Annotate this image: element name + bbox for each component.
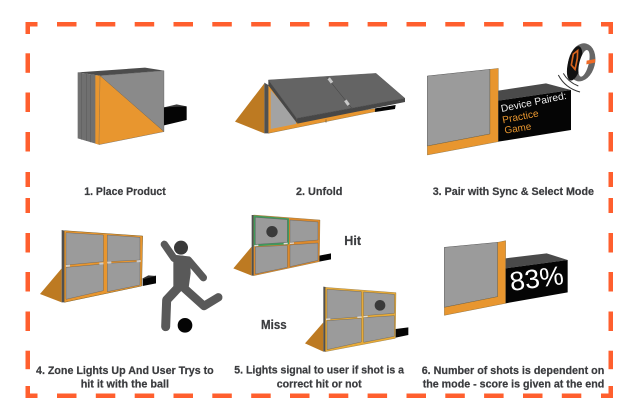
label: step 6: the mode - score is given at the end	[423, 378, 604, 390]
label: step 5: correct hit or not	[277, 378, 362, 390]
illustration: paired display	[427, 68, 571, 155]
illustration: miss wall	[305, 287, 408, 352]
icon: sync wristband	[558, 40, 599, 92]
panel: step 5 hit or miss	[233, 215, 408, 390]
label: step 2: 2. Unfold	[296, 186, 342, 198]
panel: step 2 unfold	[235, 73, 405, 198]
illustration: unfolded product	[235, 73, 405, 133]
panel: step 4 zone lights	[36, 230, 218, 391]
illustration: score display: 83%	[508, 260, 565, 297]
icon: soccer player kicking ball	[164, 241, 218, 333]
panel: step 3 pair	[427, 40, 599, 198]
label: step 4: hit it with the ball	[81, 379, 169, 391]
label: step 3: 3. Pair with Sync & Select Mode	[433, 186, 594, 198]
label: step 4: 4. Zone Lights Up And User Trys to	[36, 365, 214, 377]
illustration: paired display: Device Paired:	[500, 91, 568, 115]
label: step 1: 1. Place Product	[84, 186, 166, 198]
illustration: paired display: Practice	[501, 108, 540, 126]
illustration: wall with lit zones	[40, 230, 156, 302]
panel: step 6 score	[422, 241, 605, 390]
panel: step 1 place product	[78, 68, 187, 198]
illustration: paired display: Game	[504, 121, 533, 137]
label: step 6	[422, 365, 605, 390]
illustration: score display	[444, 241, 568, 315]
label: step 4	[36, 365, 214, 391]
label: step 6: 6. Number of shots is dependent on	[422, 365, 605, 377]
label: step 5: 5. Lights signal to user if shot is a	[234, 365, 405, 377]
label: miss: Miss	[261, 318, 287, 332]
illustration: folded product	[78, 68, 187, 145]
label: step 5	[234, 365, 405, 390]
illustration: hit wall	[233, 215, 331, 276]
label: hit: Hit	[344, 234, 362, 248]
